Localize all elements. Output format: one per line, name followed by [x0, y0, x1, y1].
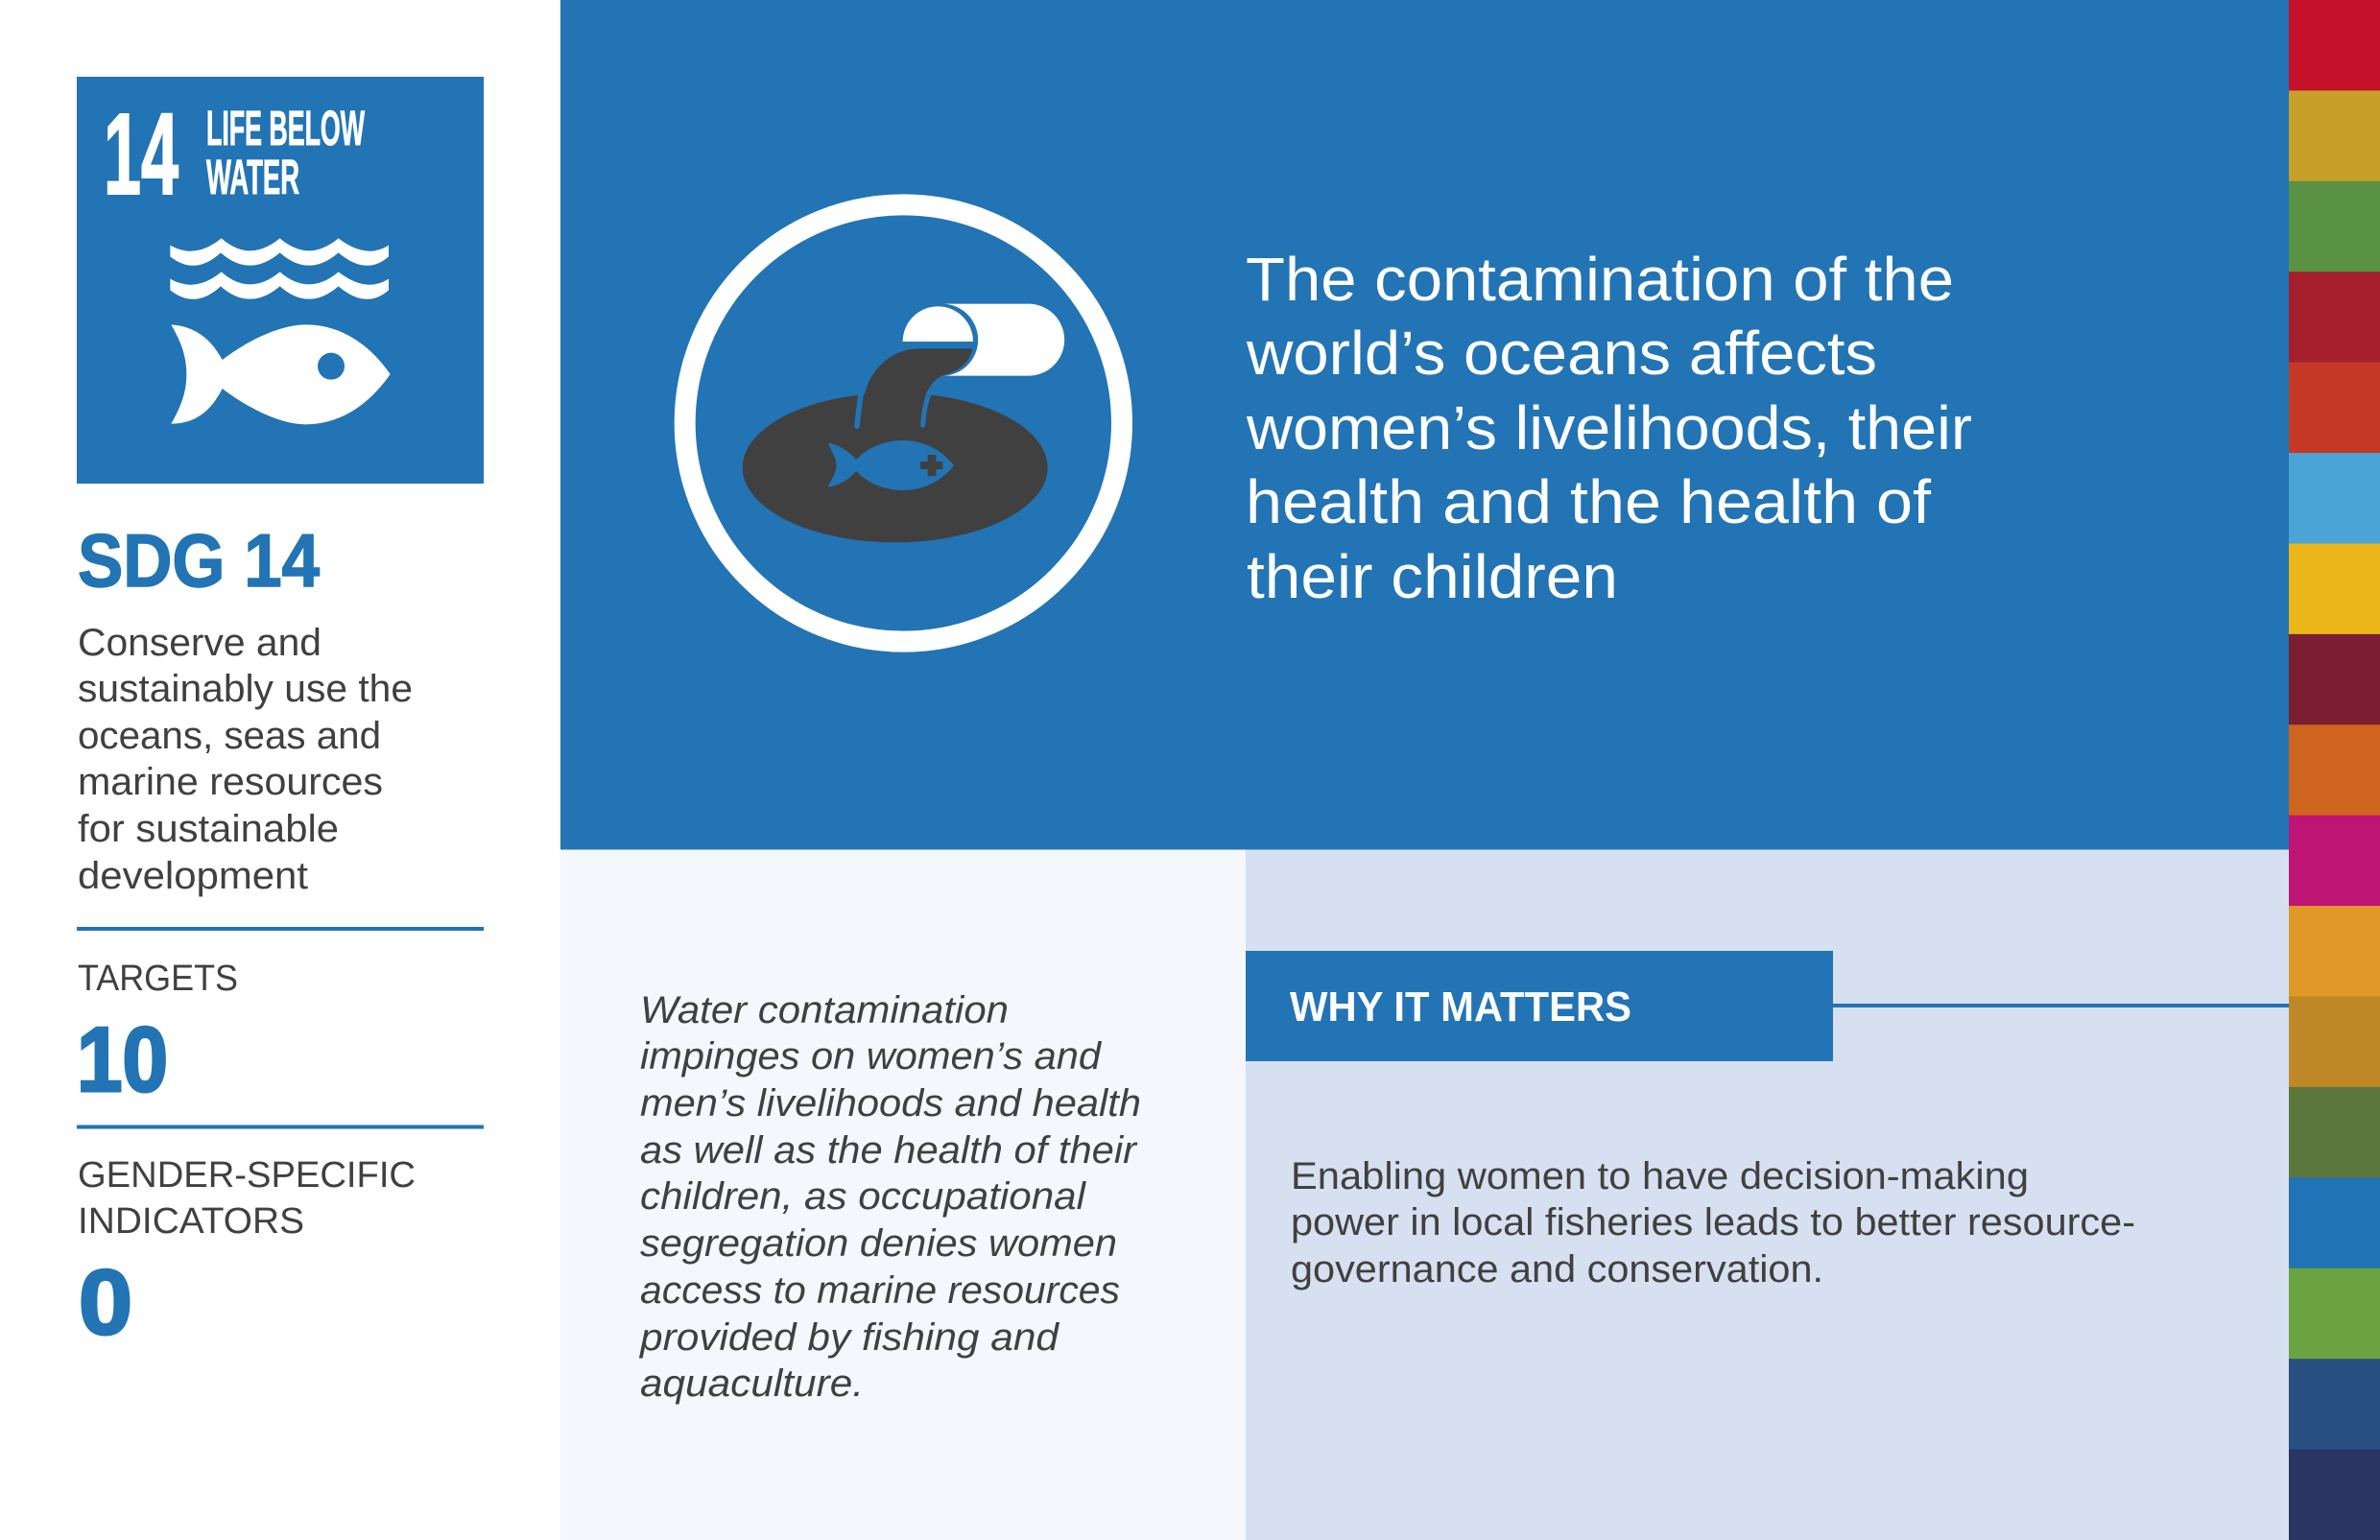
connector line [1833, 1004, 2289, 1007]
heading: main statement: The contamination of the [1246, 245, 1954, 314]
text: water contamination explanation: provided by fishing and [639, 1316, 1060, 1359]
panel: top blue banner [560, 0, 2289, 850]
text: water contamination explanation: access to marine resources [640, 1269, 1120, 1312]
label: gender-specific indicators [78, 1155, 416, 1242]
tile title: LIFE BELOW [206, 101, 365, 155]
panel: light explanatory background [560, 850, 1246, 1540]
tile number 14: 14 [104, 88, 178, 219]
number: 0 indicators: 0 [79, 1251, 132, 1354]
cross mark [920, 455, 942, 476]
colour strip: 17 SDG colours [2289, 0, 2380, 1540]
header: why it matters [1246, 951, 1833, 1061]
heading: main statement: women’s livelihoods, their [1246, 393, 1972, 462]
tile title [206, 101, 365, 204]
text: goal description [78, 622, 413, 897]
polluted stream [860, 348, 972, 432]
stream outline [857, 391, 930, 426]
heading: main statement: health and the health of [1246, 467, 1931, 536]
text: goal description: Conserve and [78, 622, 321, 664]
pipe [903, 304, 1064, 376]
label: gender-specific indicators: GENDER-SPECIFIC [78, 1155, 416, 1196]
heading: main statement: their children [1247, 542, 1618, 611]
text: goal description: marine resources [78, 761, 383, 803]
label: gender-specific indicators: INDICATORS [78, 1201, 304, 1242]
divider: above indicators [77, 1125, 484, 1128]
text: why it matters body: power in local fisheries leads to better resource- [1291, 1201, 2135, 1244]
text: why it matters body: Enabling women to have decision-making [1291, 1155, 2029, 1197]
header: why it matters: WHY IT MATTERS [1290, 983, 1631, 1031]
icon: waves and fish [170, 238, 391, 424]
polluted pool [743, 392, 1048, 542]
text: water contamination explanation: aquaculture. [640, 1362, 864, 1405]
heading: main statement: world’s oceans affects [1246, 319, 1877, 388]
text: water contamination explanation: children, as occupational [640, 1175, 1086, 1218]
number: 10 targets: 10 [77, 1008, 168, 1111]
divider: above targets [77, 927, 484, 931]
panel: why it matters background [1246, 850, 2289, 1540]
text: water contamination explanation [639, 989, 1141, 1405]
tile title: WATER [206, 150, 299, 204]
text: goal description: oceans, seas and [78, 715, 381, 757]
heading: main statement [1246, 245, 1972, 611]
icon: polluted water pipe in circle [685, 204, 1122, 642]
text: water contamination explanation: Water contamination [640, 989, 1009, 1031]
text: goal description: sustainably use the [78, 668, 413, 710]
text: water contamination explanation: segregation denies women [640, 1222, 1117, 1265]
text: goal description: for sustainable [78, 808, 339, 850]
text: water contamination explanation: as well as the health of their [640, 1129, 1138, 1172]
text: why it matters body: governance and conservation. [1291, 1248, 1823, 1291]
text: why it matters body [1291, 1155, 2135, 1291]
panel: SDG 14 goal tile [77, 77, 484, 484]
text: water contamination explanation: men’s livelihoods and health [640, 1082, 1141, 1125]
text: goal description: development [78, 855, 308, 897]
text: water contamination explanation: impinges on women’s and [640, 1035, 1103, 1078]
heading: SDG 14: SDG 14 [78, 518, 320, 603]
label: targets: TARGETS [78, 959, 238, 999]
contaminated fish [828, 440, 954, 490]
